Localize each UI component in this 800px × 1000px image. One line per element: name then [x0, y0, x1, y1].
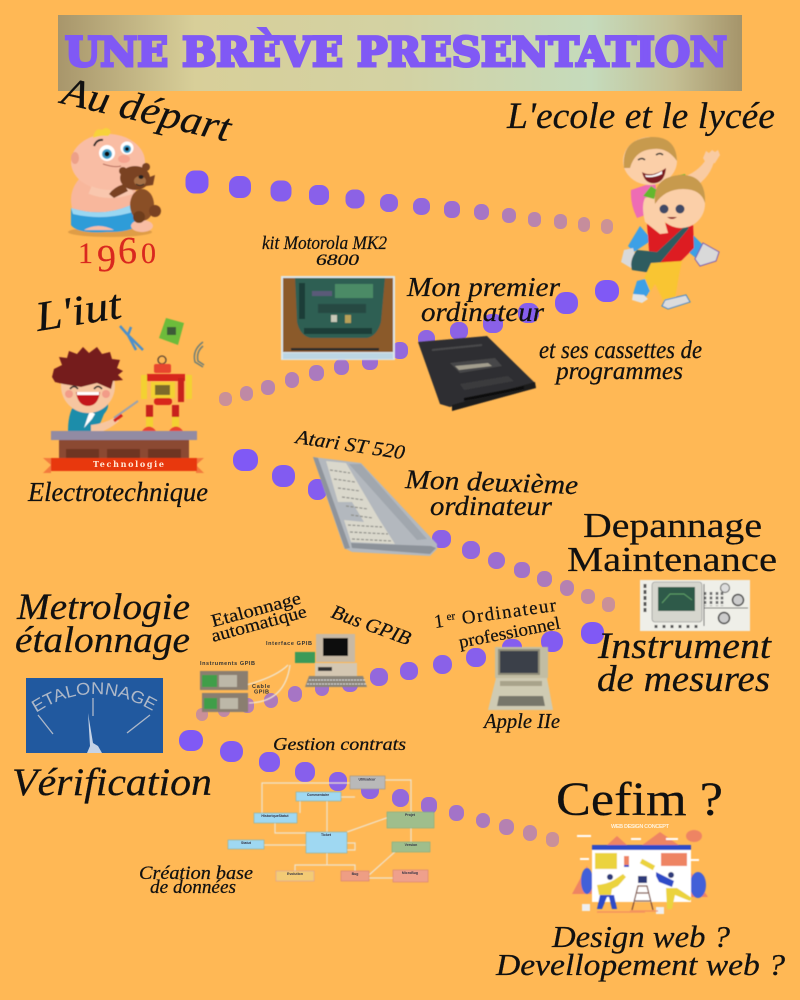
- title banner: [58, 15, 742, 91]
- heading: cefim: Cefim ?: [556, 773, 723, 826]
- heading: mon premier ordinateur: Mon premier: [406, 272, 561, 302]
- diagram: uml database schema: Utilisateur: [358, 778, 376, 782]
- caption: kit Motorola: kit Motorola MK2: [262, 233, 387, 254]
- diagram: gpib setup: GPIB: [254, 690, 269, 696]
- section: au départ: [55, 67, 237, 280]
- caption: apple iie: Apple IIe: [482, 709, 560, 733]
- diagram: uml database schema: Version: [405, 843, 417, 847]
- diagram: gpib setup: [200, 634, 367, 712]
- heading: ecole et lycée: L'ecole et le lycée: [506, 96, 775, 137]
- caption: 1er ordinateur professionnel: professionnel: [457, 613, 562, 652]
- section: base de données: [139, 734, 434, 898]
- section: cefim: [495, 773, 786, 982]
- section: métrologie: [12, 587, 414, 804]
- photo: cassette recorder: [418, 336, 536, 411]
- photo: Motorola kit board: [281, 276, 395, 360]
- caption: création base de données: de données: [150, 877, 236, 898]
- dotted path 5: metrology to cefim: [179, 730, 559, 847]
- heading: instrument de mesures: Instrument: [597, 626, 773, 667]
- caption: cassettes de programmes: [539, 337, 702, 385]
- heading: mon premier ordinateur: ordinateur: [421, 297, 545, 327]
- dotted path 3: iut to instruments: [233, 449, 615, 612]
- dotted path 1: baby to school: [186, 170, 613, 234]
- diagram: uml database schema: [228, 776, 434, 882]
- heading: mon deuxième ordinateur: [404, 464, 579, 521]
- dotted path 4: instruments to metrology: [196, 622, 604, 721]
- heading: mon deuxième ordinateur: ordinateur: [430, 491, 553, 521]
- illustration: web design concept: WEB DESIGN CONCEPT: [611, 824, 670, 830]
- icon: baby with teddy bear: [68, 128, 161, 237]
- heading: depannage maintenance: [567, 506, 777, 579]
- icon: boy with robot at workbench: [43, 318, 204, 473]
- caption: cassettes de programmes: et ses cassettes de: [539, 337, 702, 364]
- caption: développement web: Devellopement web ?: [495, 947, 786, 982]
- diagram: uml database schema: HistoriqueStatut: [261, 814, 289, 818]
- caption: etalonnage automatique: Etalonnage: [209, 588, 303, 631]
- caption: 1er ordinateur professionnel: er: [446, 610, 456, 623]
- caption: bus gpib: Bus GPIB: [328, 601, 414, 650]
- caption: cassettes de programmes: programmes: [554, 358, 683, 385]
- caption: etalonnage automatique: automatique: [209, 601, 309, 646]
- caption: etalonnage automatique: [209, 588, 309, 646]
- section: apple iie: [433, 595, 562, 733]
- heading: instrument de mesures: de mesures: [597, 659, 770, 700]
- title: UNE BRÈVE PRESENTATION: [65, 29, 727, 76]
- date: 1960: 9: [97, 238, 116, 280]
- diagram: gpib setup: Interface GPIB: [266, 641, 312, 647]
- heading: depannage maintenance: Maintenance: [567, 540, 777, 579]
- section: iut: [27, 282, 208, 507]
- diagram: uml database schema: Bug: [352, 872, 358, 876]
- date: 1960: 6: [118, 230, 137, 272]
- caption: création base de données: Création base: [139, 863, 253, 884]
- heading: metrologie étalonnage: [15, 587, 190, 661]
- diagram: uml database schema: MicroBug: [402, 871, 418, 875]
- diagram: uml database schema: Statut: [241, 841, 252, 845]
- heading: l'iut: L'iut: [31, 282, 126, 341]
- date: 1960: 0: [141, 237, 156, 270]
- heading: instrument de mesures: [597, 626, 773, 700]
- section: deuxième ordinateur: [292, 426, 579, 556]
- diagram: uml database schema: Commentaire: [307, 793, 329, 797]
- date: 1960: 1: [78, 237, 93, 270]
- photo: apple iie computer: [488, 647, 553, 710]
- diagram: gpib setup: Instruments GPIB: [200, 661, 255, 667]
- heading: metrologie étalonnage: Metrologie: [16, 587, 190, 628]
- heading: au départ: Au départ: [55, 67, 237, 151]
- diagram: gpib setup: Cable: [252, 684, 270, 690]
- caption: 1er ordinateur professionnel: Ordinateur: [461, 595, 559, 629]
- section: premier ordinateur: [262, 233, 702, 411]
- photo: atari computer: [313, 457, 437, 556]
- caption: création base de données: [139, 863, 253, 898]
- caption: design web: Design web ?: [551, 919, 731, 954]
- icon: two children: [621, 137, 720, 309]
- caption: electrotechnique: Electrotechnique: [27, 477, 208, 507]
- caption: 1er ordinateur professionnel: [433, 595, 562, 652]
- heading: mon deuxième ordinateur: Mon deuxième: [404, 464, 579, 500]
- caption: atari st 520: Atari ST 520: [292, 426, 406, 464]
- dotted path 2: school to iut: [219, 280, 619, 406]
- icon: calibration gauge: ETALONNAGE: [31, 682, 158, 712]
- photo: oscilloscope: [640, 580, 750, 631]
- illustration: web design concept: [572, 824, 708, 914]
- section: dépannage: [567, 506, 777, 700]
- banner label: technologie: Technologie: [93, 459, 164, 469]
- section: école et lycée: [506, 96, 775, 309]
- heading: depannage maintenance: Depannage: [583, 506, 762, 545]
- icon: calibration gauge: [26, 678, 163, 753]
- diagram: uml database schema: Ticket: [321, 833, 332, 837]
- caption: 6800: 6800: [316, 252, 359, 269]
- caption: 1er ordinateur professionnel: 1: [433, 611, 445, 633]
- caption: gestion contrats: Gestion contrats: [273, 734, 406, 754]
- heading: vérification: Vérification: [12, 761, 212, 804]
- diagram: uml database schema: Evolution: [287, 872, 303, 876]
- heading: metrologie étalonnage: étalonnage: [15, 620, 190, 661]
- diagram: uml database schema: Projet: [405, 813, 416, 817]
- heading: mon premier ordinateur: [406, 272, 561, 327]
